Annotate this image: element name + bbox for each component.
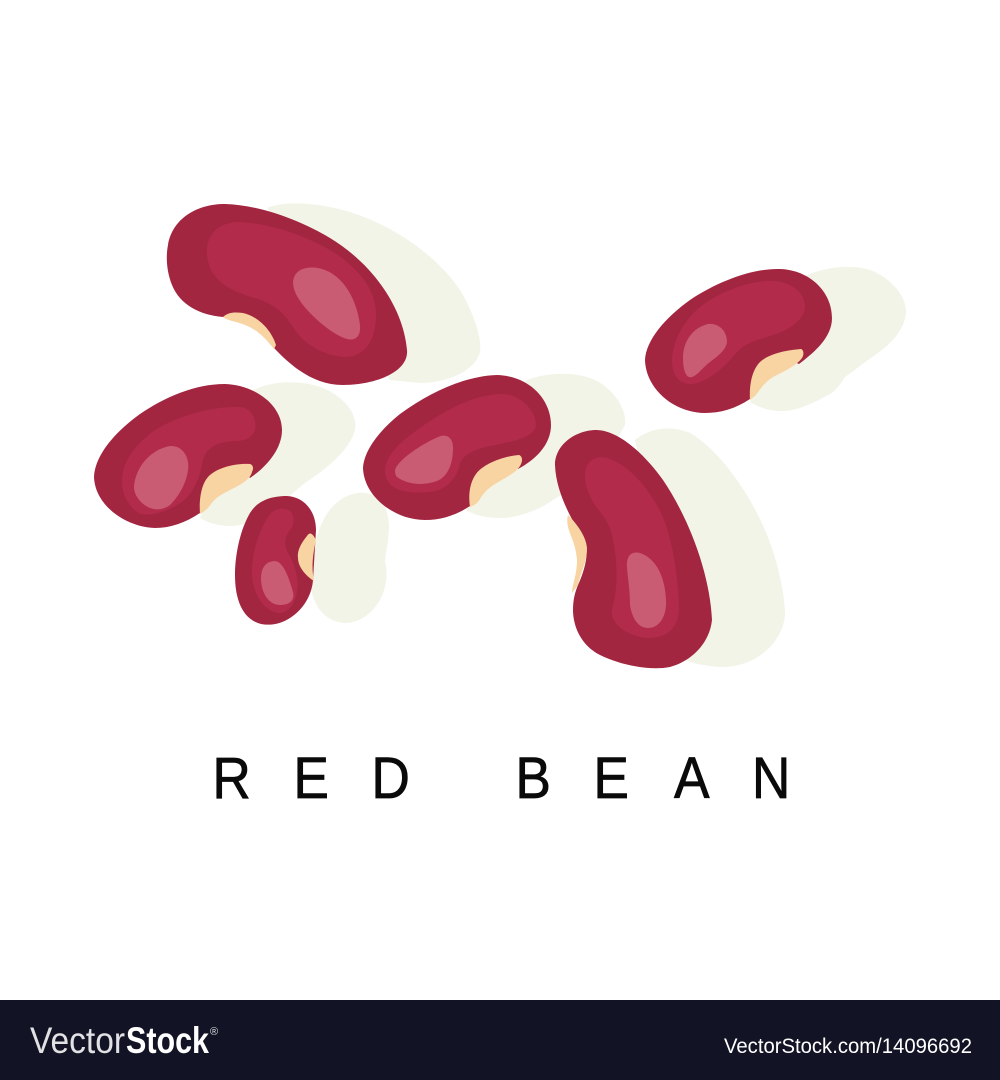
image id link: VectorStock.com/14096692 <box>724 1035 972 1058</box>
bean: lower right large <box>555 429 785 668</box>
illustration: red beans <box>94 203 906 668</box>
logo: VectorStock: Vector <box>30 1020 125 1061</box>
footer bar <box>0 1000 1000 1080</box>
bean: upper right <box>645 267 906 413</box>
logo: VectorStock <box>30 1020 218 1061</box>
bean: center <box>363 374 625 520</box>
logo: VectorStock: Stock <box>126 1020 209 1061</box>
logo: VectorStock: ® <box>210 1026 218 1038</box>
title: RED BEAN <box>212 746 790 810</box>
bean: top large <box>167 203 480 385</box>
bean: left <box>94 382 355 528</box>
bean: small <box>235 493 389 625</box>
